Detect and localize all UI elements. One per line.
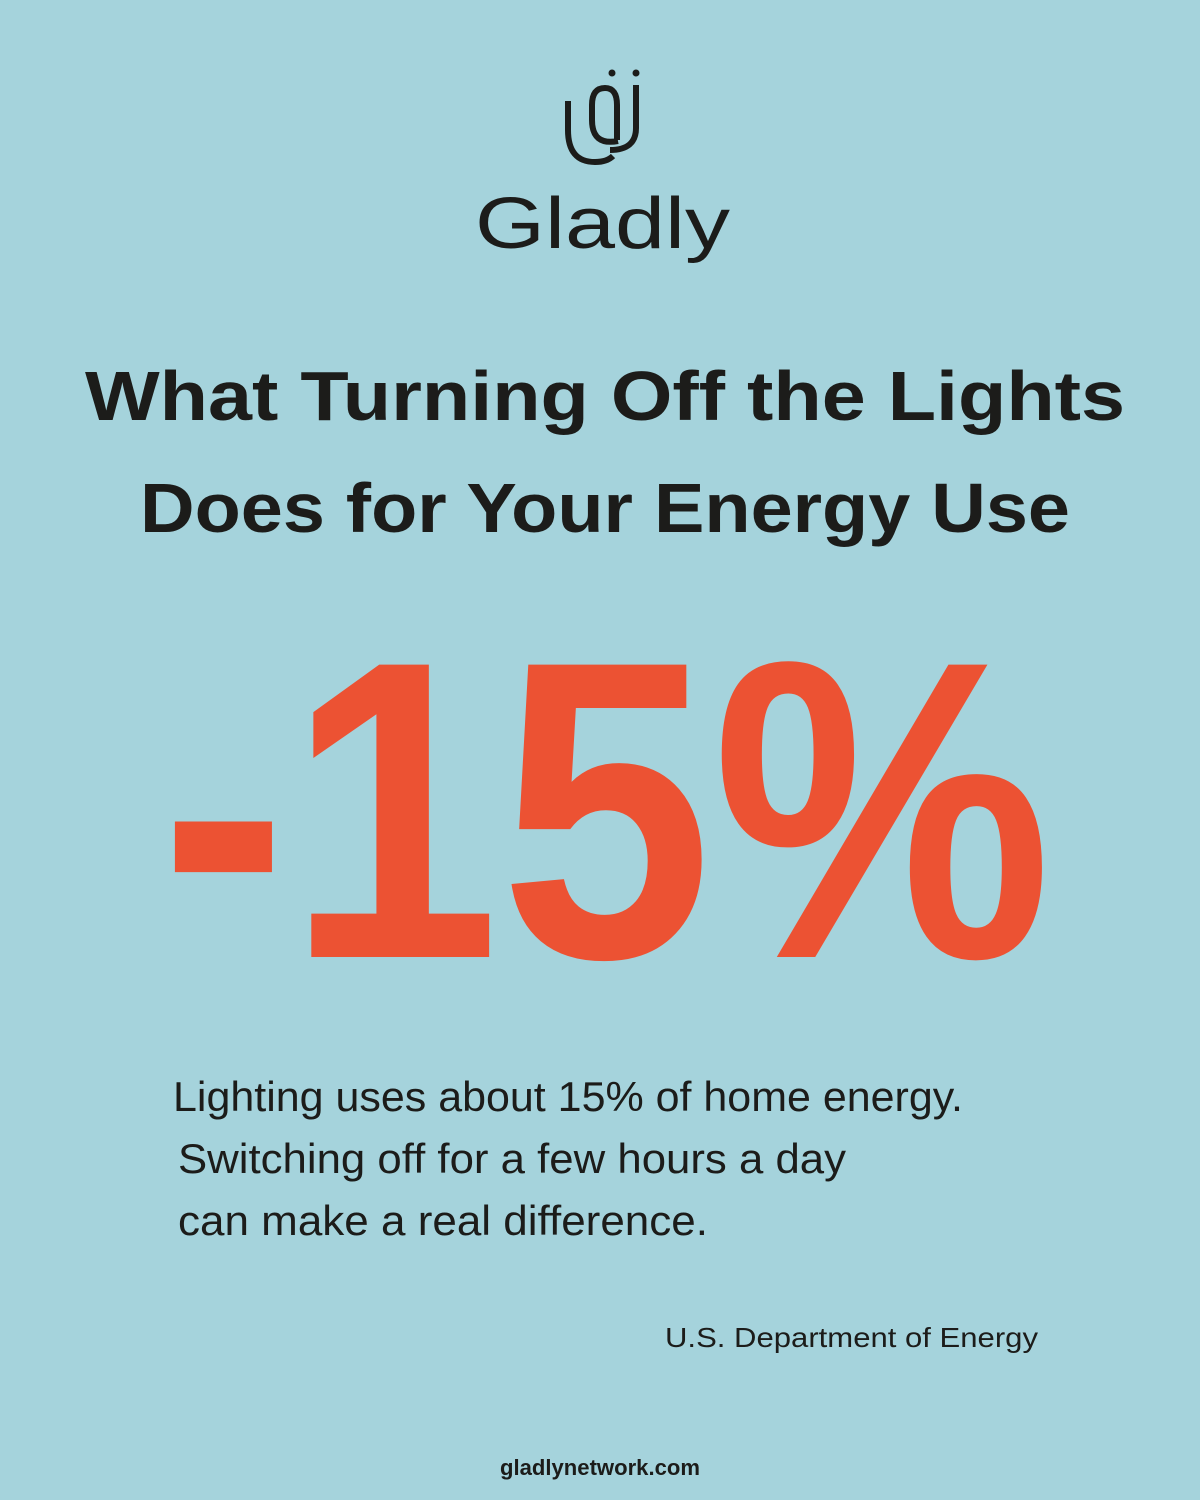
body text [173, 1073, 963, 1244]
wordmark: Gladly [475, 184, 730, 264]
source: U.S. Department of Energy [665, 1322, 1038, 1353]
body text: can make a real difference. [178, 1197, 708, 1244]
title: Does for Your Energy Use [140, 469, 1070, 547]
body text: Lighting uses about 15% of home energy. [173, 1073, 963, 1120]
body text: Switching off for a few hours a day [178, 1135, 846, 1182]
big stat: -15% [160, 573, 1052, 1048]
title: What Turning Off the Lights [85, 357, 1125, 435]
footer url: gladlynetwork.com [500, 1455, 700, 1480]
logo mark [568, 70, 640, 162]
title [85, 357, 1125, 547]
